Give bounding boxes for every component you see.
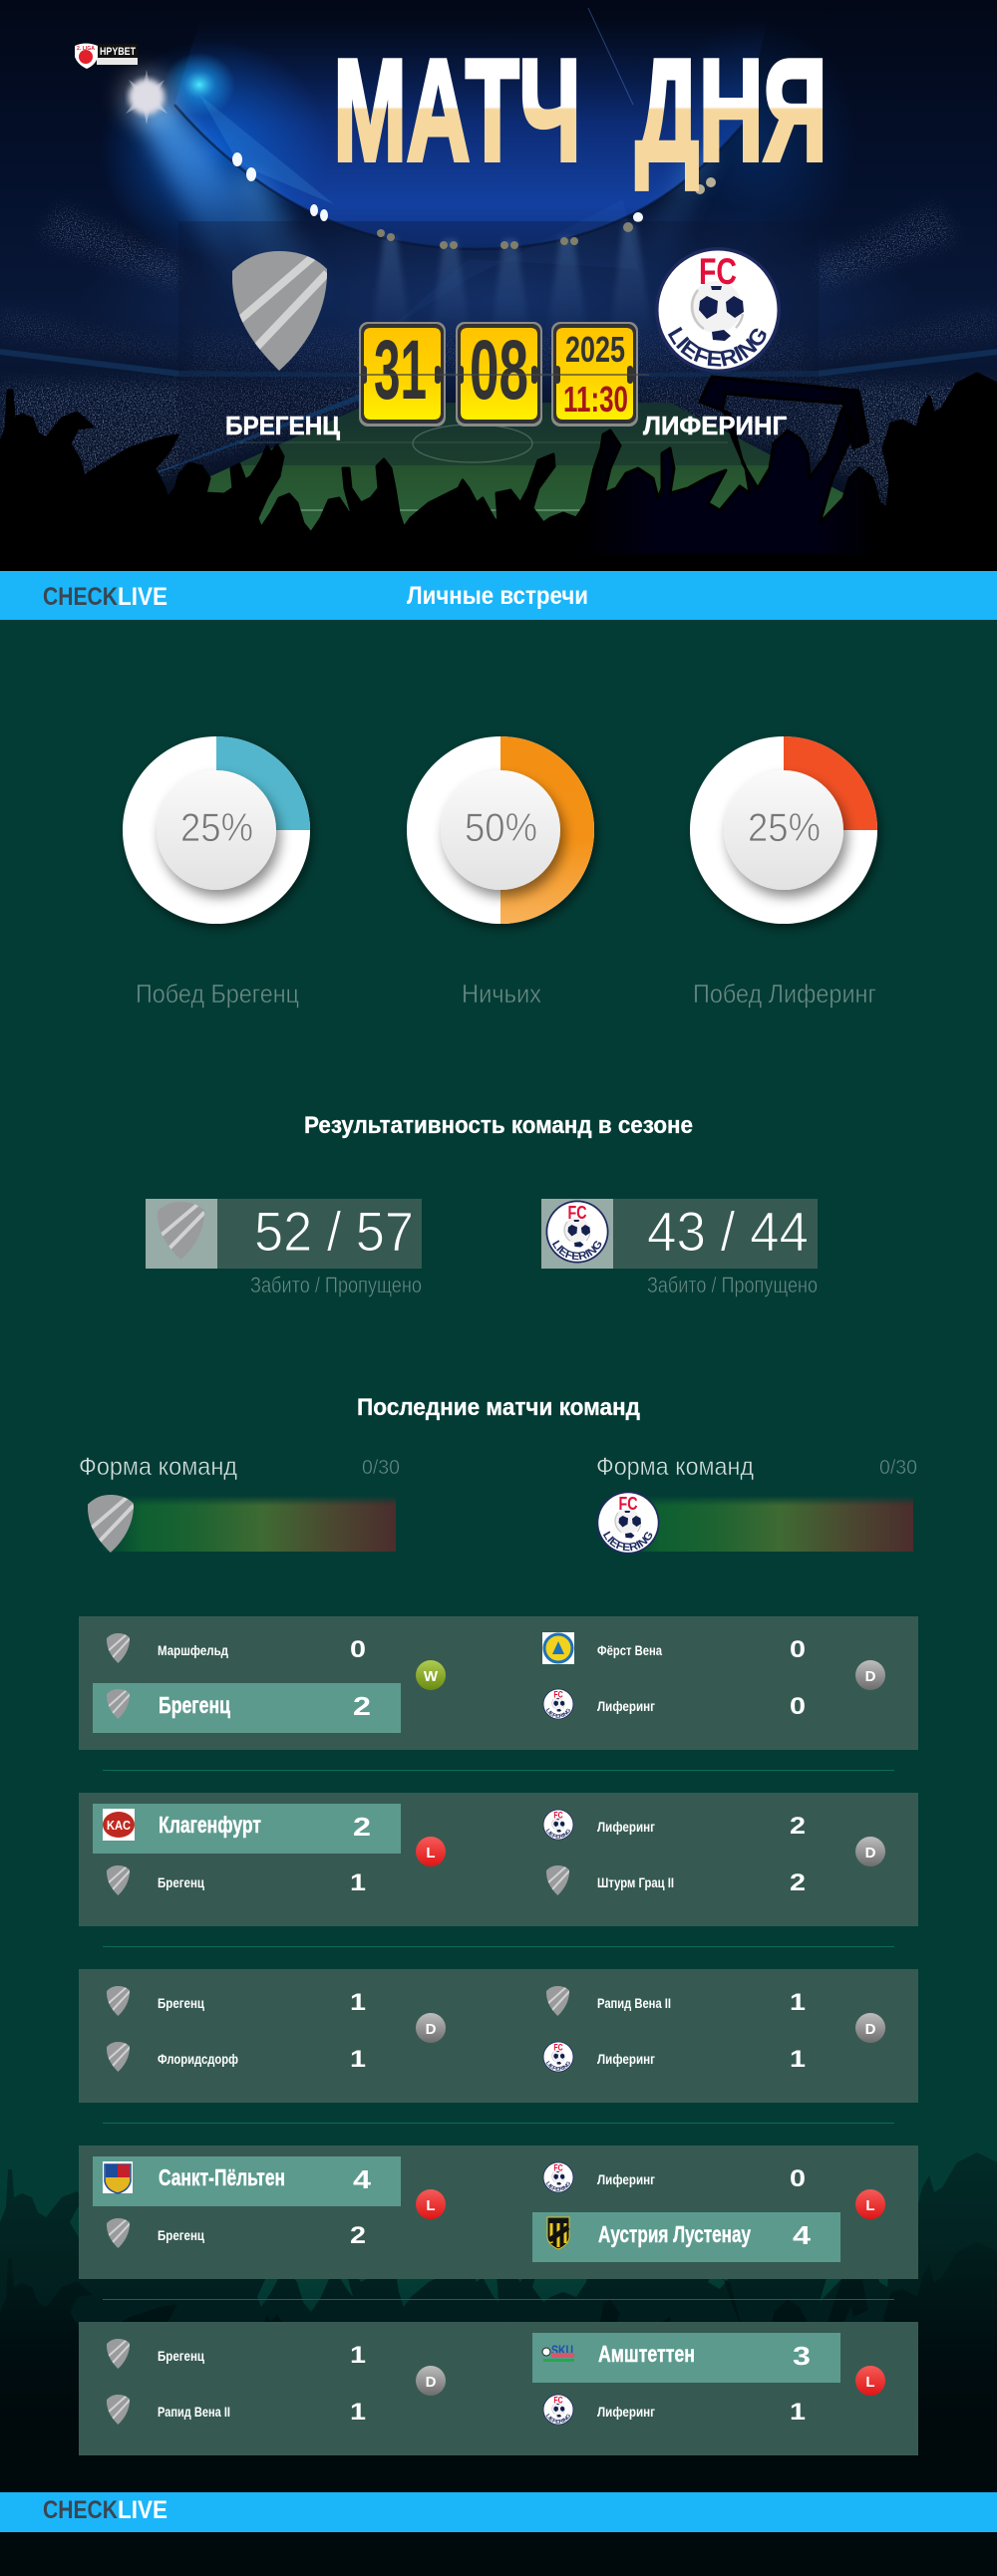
hero: black floor <box>0 554 997 571</box>
match panel 3 <box>79 1969 918 2103</box>
heading: season scoring: Результативность команд в сезоне <box>304 1112 693 1139</box>
Rapid Vienna II row <box>107 2395 366 2426</box>
Austria Lustenau row: Аустрия Лустенау <box>598 2221 751 2247</box>
Rapid Vienna II row <box>546 1986 806 2016</box>
badge L <box>416 1837 446 1866</box>
top bar: LIVE <box>118 583 167 611</box>
Amstetten row: 3 <box>793 2341 811 2371</box>
team name: Liefering: ЛИФЕРИНГ <box>643 411 787 440</box>
badge L <box>855 2189 885 2219</box>
badge D: D <box>865 1668 876 1685</box>
flip card: month: 08 <box>470 323 528 417</box>
badge D <box>855 1837 885 1866</box>
divider <box>103 2123 894 2124</box>
Liefering row <box>542 1810 806 1840</box>
badge D: D <box>865 1845 876 1861</box>
Liefering row: 0 <box>790 1693 806 1720</box>
First Vienna row <box>542 1632 806 1664</box>
form: Liefering: FC <box>618 1493 638 1514</box>
Liefering row <box>542 2041 806 2073</box>
Amstetten row <box>542 2341 811 2371</box>
flip card: year and time: 11:30 <box>563 379 628 420</box>
hero: cheering crowd silhouette <box>0 374 997 573</box>
Sturm Graz II row <box>546 1865 806 1896</box>
Bregenz row: Брегенц <box>158 2227 204 2243</box>
Liefering row: LIEFERING <box>546 1708 570 1718</box>
league logo: 2. LIGA <box>77 46 95 52</box>
donut: Liefering wins <box>690 736 877 924</box>
badge L: L <box>865 2374 875 2391</box>
badge L: L <box>865 2197 875 2214</box>
top bar <box>0 571 997 620</box>
Liefering row: Лиферинг <box>597 2404 655 2420</box>
match panel 4 <box>79 2146 918 2279</box>
Liefering row: Лиферинг <box>597 2051 655 2067</box>
icon: Liefering crest large: LIEFERING <box>668 327 766 367</box>
form: Bregenz: 0/30 <box>362 1457 400 1479</box>
Bregenz row: Брегенц <box>158 2348 204 2364</box>
flip card: year and time <box>551 322 638 427</box>
Marshfeld row: Маршфельд <box>158 1642 228 1658</box>
Liefering row: LIEFERING <box>546 2414 570 2424</box>
Liefering row: FC <box>553 2396 563 2406</box>
form: Liefering: LIEFERING <box>603 1531 652 1551</box>
Liefering row: LIEFERING <box>546 1829 570 1839</box>
Sturm Graz II row: Штурм Грац II <box>597 1874 674 1890</box>
Bregenz row: 1 <box>350 2342 366 2369</box>
bottom bar: CHECK <box>43 2496 118 2524</box>
badge L <box>855 2366 885 2396</box>
Liefering row: FC <box>553 2163 563 2173</box>
icon: Bregenz crest large <box>232 251 327 371</box>
form: Bregenz <box>79 1453 400 1553</box>
Bregenz row: Брегенц <box>158 1874 204 1890</box>
stat box: Liefering goals <box>541 1199 818 1269</box>
badge W: W <box>424 1668 439 1685</box>
donut: Bregenz wins <box>123 736 310 924</box>
hero: stadium scene <box>0 0 997 573</box>
flip card: month <box>456 322 542 427</box>
icon: Liefering crest large <box>655 247 781 373</box>
bottom bar: LIVE <box>118 2496 167 2524</box>
Austria Lustenau row <box>547 2217 812 2250</box>
Klagenfurt row <box>103 1809 371 1842</box>
Liefering row: 2 <box>790 1813 806 1840</box>
First Vienna row: Фёрст Вена <box>597 1642 662 1658</box>
league logo <box>75 44 138 69</box>
hero: translucent match panel <box>178 221 819 465</box>
stat box: Liefering goals: FC <box>568 1202 586 1223</box>
stat box: Liefering goals: 43 / 44 <box>647 1200 809 1263</box>
Bregenz row: 1 <box>350 1989 366 2016</box>
team name: Bregenz: БРЕГЕНЦ <box>225 411 340 440</box>
flip card: day <box>359 322 446 427</box>
match panel 1 <box>79 1616 918 1750</box>
donut: draws: 50% <box>465 806 537 850</box>
Amstetten row: SKU <box>551 2342 573 2358</box>
Klagenfurt row: Клагенфурт <box>159 1812 261 1838</box>
Bregenz row: 1 <box>350 1869 366 1896</box>
heading: last matches: Последние матчи команд <box>357 1394 640 1421</box>
St. Polten row: 4 <box>353 2164 372 2194</box>
Bregenz row <box>107 2339 366 2369</box>
form: Liefering <box>596 1453 917 1555</box>
St. Polten row <box>103 2161 372 2194</box>
label: Liefering wins: Побед Лиферинг <box>693 979 876 1008</box>
Klagenfurt row: KAC <box>107 1818 132 1833</box>
badge L: L <box>426 2197 436 2214</box>
background crowd back layer <box>0 2152 997 2352</box>
match panel 2 <box>79 1793 918 1926</box>
badge L: L <box>426 1845 436 1861</box>
Liefering row: LIEFERING <box>546 2061 570 2071</box>
background dark foot <box>0 2461 997 2576</box>
Marshfeld row: 0 <box>350 1636 366 1663</box>
badge L <box>416 2189 446 2219</box>
form: Bregenz: Форма команд <box>79 1453 237 1481</box>
badge D <box>416 2366 446 2396</box>
caption: Liefering goals: Забито / Пропущено <box>647 1273 818 1297</box>
icon: Liefering crest large: FC <box>699 251 737 292</box>
Liefering row: Лиферинг <box>597 1698 655 1714</box>
First Vienna row: 0 <box>790 1636 806 1663</box>
Bregenz row: Брегенц <box>158 1995 204 2011</box>
match panel 5 <box>79 2322 918 2455</box>
divider <box>103 1770 894 1771</box>
Floridsdorf row: Флоридсдорф <box>158 2051 238 2067</box>
Floridsdorf row <box>107 2042 366 2073</box>
title: МАТЧ <box>333 30 580 191</box>
badge D <box>855 1660 885 1690</box>
flip card: day: 31 <box>374 323 427 417</box>
badge D: D <box>865 2021 876 2038</box>
league logo: HPYBET <box>100 46 136 58</box>
Marshfeld row <box>107 1633 366 1663</box>
Rapid Vienna II row: Рапид Вена II <box>158 2404 230 2420</box>
title: ДНЯ <box>636 30 828 191</box>
Liefering row: 1 <box>790 2046 806 2073</box>
flip card: year and time: 2025 <box>565 329 625 370</box>
stat box: Bregenz goals <box>146 1199 422 1269</box>
background crowd front layer <box>0 2242 997 2441</box>
badge D: D <box>426 2374 437 2391</box>
donut: draws <box>407 736 594 924</box>
Liefering row: LIEFERING <box>546 2181 570 2191</box>
top bar: CHECK <box>43 583 118 611</box>
Liefering row: 1 <box>790 2399 806 2426</box>
label: draws: Ничьих <box>462 979 541 1008</box>
Bregenz row <box>107 2218 366 2249</box>
Liefering row: 0 <box>790 2165 806 2192</box>
Liefering row: FC <box>553 1690 563 1700</box>
Bregenz row: 2 <box>353 1691 371 1721</box>
badge D <box>855 2013 885 2043</box>
Sturm Graz II row: 2 <box>790 1869 806 1896</box>
Floridsdorf row: 1 <box>350 2046 366 2073</box>
Bregenz row <box>107 1986 366 2016</box>
badge D <box>416 2013 446 2043</box>
Liefering row <box>542 1688 806 1720</box>
form: Liefering: Форма команд <box>596 1453 754 1481</box>
top bar: Личные встречи <box>407 582 588 610</box>
badge W <box>416 1660 446 1690</box>
Bregenz row <box>107 1689 371 1721</box>
Liefering row: FC <box>553 2043 563 2053</box>
Rapid Vienna II row: Рапид Вена II <box>597 1995 671 2011</box>
divider <box>103 2299 894 2300</box>
Liefering row <box>542 2162 806 2192</box>
donut: Bregenz wins: 25% <box>180 806 253 850</box>
stat box: Liefering goals: LIEFERING <box>552 1240 602 1260</box>
background dark foot overlay <box>0 2436 997 2576</box>
stat box: Bregenz goals: 52 / 57 <box>254 1200 414 1263</box>
Austria Lustenau row: 4 <box>793 2220 812 2250</box>
bottom bar <box>0 2492 997 2532</box>
Bregenz row: 2 <box>350 2222 366 2249</box>
Klagenfurt row: 2 <box>353 1812 371 1842</box>
background fade to dark <box>0 2282 997 2461</box>
Liefering row: Лиферинг <box>597 2171 655 2187</box>
form: Liefering: 0/30 <box>879 1457 917 1479</box>
donut: Liefering wins: 25% <box>748 806 821 850</box>
Bregenz row: Брегенц <box>159 1692 230 1718</box>
label: Bregenz wins: Побед Брегенц <box>136 979 299 1008</box>
Bregenz row <box>107 1865 366 1896</box>
Liefering row: Лиферинг <box>597 1819 655 1835</box>
Amstetten row: Амштеттен <box>598 2341 695 2367</box>
badge D: D <box>426 2021 437 2038</box>
St. Polten row: Санкт-Пёльтен <box>159 2164 285 2190</box>
Rapid Vienna II row: 1 <box>350 2399 366 2426</box>
Rapid Vienna II row: 1 <box>790 1989 806 2016</box>
divider <box>103 1946 894 1947</box>
caption: Bregenz goals: Забито / Пропущено <box>250 1273 422 1297</box>
Liefering row <box>542 2394 806 2426</box>
Liefering row: FC <box>553 1811 563 1821</box>
